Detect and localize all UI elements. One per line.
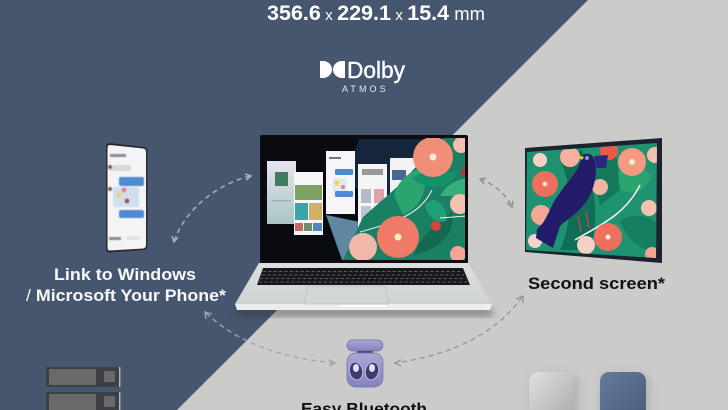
wallpaper leaves (343, 138, 466, 260)
blue tile (600, 372, 646, 410)
wallpaper blue shape (355, 139, 424, 196)
arrow: phone to laptop (172, 174, 251, 242)
dimensions heading: 356.6 x 229.1 x 15.4 mm (267, 2, 485, 25)
trackpad (304, 286, 389, 304)
wallpaper dark (262, 138, 465, 260)
app window: browser (390, 158, 416, 194)
phone (106, 143, 148, 252)
earbuds case (347, 340, 383, 387)
wallpaper (526, 143, 657, 258)
laptop base (235, 263, 492, 304)
arrow: phone to earbuds (205, 312, 335, 366)
keyboard keys (259, 272, 468, 282)
keyboard (257, 268, 470, 285)
laptop lid (260, 135, 468, 264)
arrow: laptop to tablet (480, 178, 513, 207)
bird (536, 154, 596, 248)
label: Second screen: Second screen* (528, 275, 666, 293)
case body (347, 353, 383, 387)
tablet body (525, 138, 662, 263)
right earbud (364, 361, 380, 381)
app window: store (358, 164, 387, 227)
tile shadows (529, 374, 650, 410)
wallpaper flowers (377, 216, 419, 258)
storage drive 2 (46, 392, 121, 410)
icon: Dolby double-D (320, 61, 345, 78)
phone body (106, 143, 148, 252)
tablet screen (526, 143, 657, 258)
laptop screen (262, 137, 470, 262)
app window: messages (326, 151, 355, 214)
left earbud (348, 361, 364, 381)
app window: gallery (294, 172, 323, 235)
arrow: tablet to earbuds (395, 296, 523, 366)
tablet (525, 138, 663, 263)
laptop shadow (236, 308, 494, 316)
laptop front edge (235, 304, 492, 310)
label: Link to Windows: Link to Windows (54, 266, 196, 284)
silver tile (529, 372, 575, 410)
lid (347, 340, 383, 351)
app window: lock screen (267, 161, 296, 224)
flowers (618, 148, 646, 176)
Dolby Atmos logo (320, 57, 405, 94)
leaves (560, 150, 595, 250)
Dolby wordmark: Dolby (347, 57, 405, 83)
ATMOS label: ATMOS (342, 84, 387, 94)
storage drive 1 (46, 367, 121, 387)
label: Link to Windows (26, 266, 227, 305)
chat bubbles (108, 154, 144, 240)
laptop (235, 135, 494, 316)
label: Link to Windows: / Microsoft Your Phone* (26, 287, 227, 305)
phone screen (108, 145, 146, 250)
storage icon (46, 367, 121, 410)
